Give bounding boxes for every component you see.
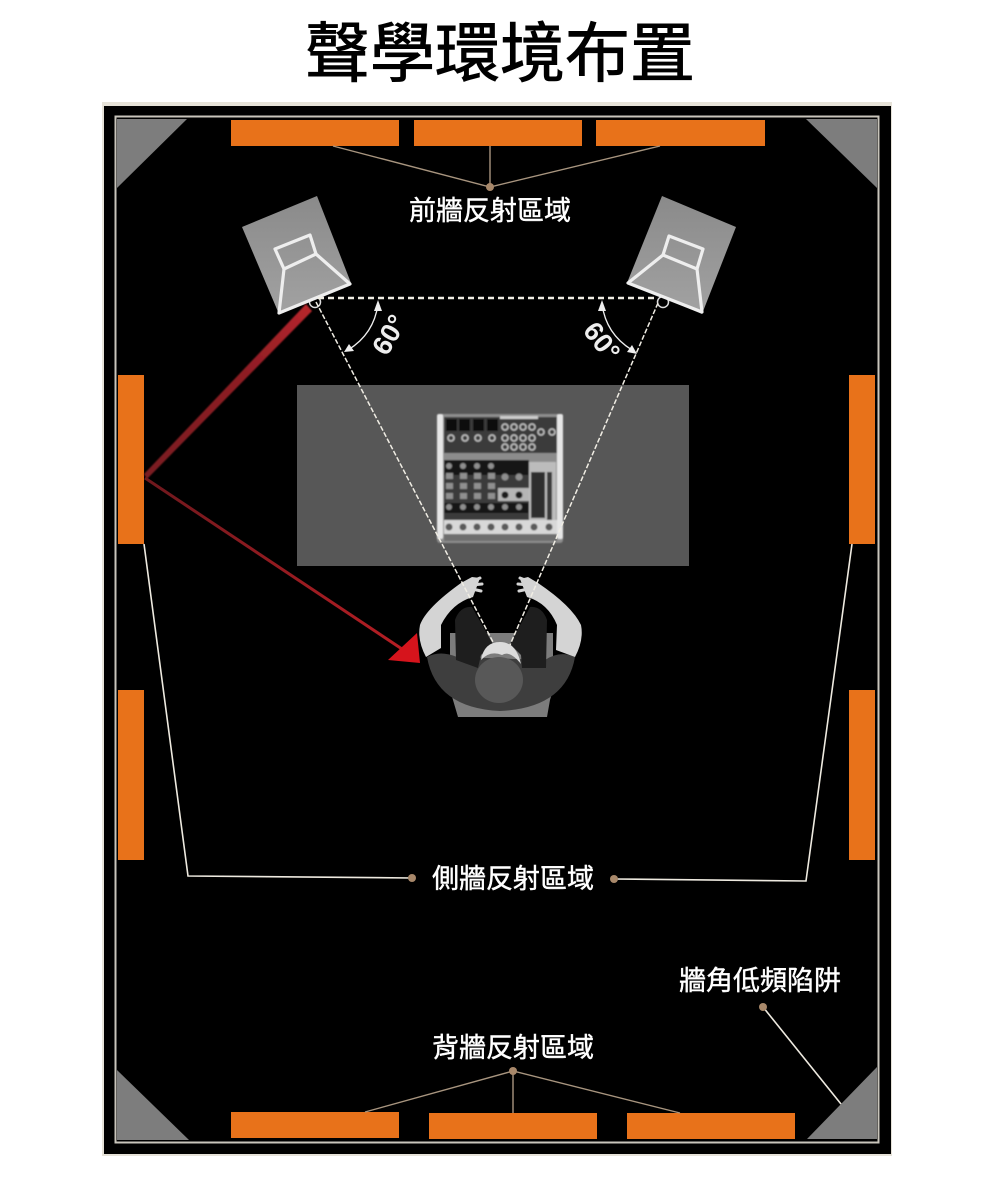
right 60 degree angle arc: [577, 300, 637, 367]
right 60 degree angle arc: 60°: [577, 316, 626, 367]
torso: [427, 654, 575, 711]
label: front wall reflection zone: 前牆反射區域: [409, 196, 571, 226]
chair: [450, 633, 553, 717]
title: 聲學環境布置: [305, 17, 695, 90]
left 60 degree angle arc: [344, 300, 413, 360]
right speaker: [627, 196, 736, 314]
side wall leader lines: [144, 544, 852, 883]
label: side wall reflection zone: 側牆反射區域: [432, 864, 594, 894]
front wall panels: [231, 120, 765, 146]
corner trap leader line: [759, 1003, 841, 1104]
left 60 degree angle arc: 60°: [366, 310, 413, 360]
mixer: [437, 414, 563, 543]
label: corner bass trap: 牆角低頻陷阱: [679, 966, 841, 996]
right hand fingers: [518, 578, 530, 591]
left arm: [419, 577, 480, 657]
headband: [481, 642, 521, 664]
corner bass trap: top left: [117, 119, 187, 188]
red reflection arrow to listener: [145, 478, 420, 663]
left speaker: [242, 196, 351, 314]
left hand fingers: [470, 578, 482, 591]
person seated at mixer: [419, 577, 582, 717]
back wall leader lines: [365, 1067, 680, 1113]
head: [475, 657, 523, 703]
corner bass trap: bottom right: [807, 1067, 877, 1139]
corner bass trap: top right: [806, 119, 877, 188]
legs: [455, 607, 493, 668]
right arm: [520, 577, 582, 657]
left wall panels: [118, 375, 144, 860]
corner bass trap: bottom left: [117, 1070, 189, 1140]
desk: [297, 385, 689, 566]
back wall panels: [231, 1112, 795, 1139]
listening triangle dashed lines: [316, 298, 658, 645]
right wall panels: [849, 375, 875, 860]
red reflection arrow to speaker: [144, 304, 312, 479]
front wall leader lines: [333, 146, 660, 191]
label: back wall reflection zone: 背牆反射區域: [432, 1033, 594, 1063]
room floor plan panel: [102, 102, 892, 1156]
